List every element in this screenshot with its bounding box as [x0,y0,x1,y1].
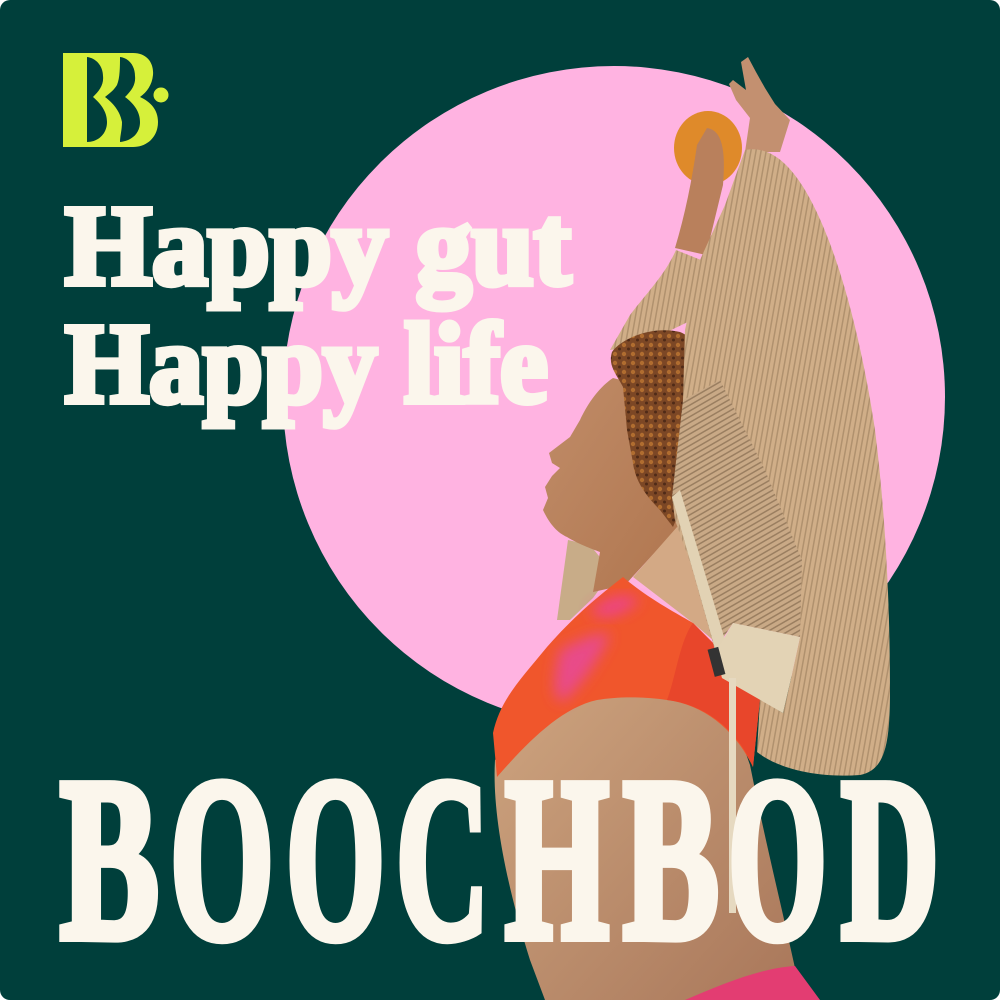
heading: Happy life: Happy life [65,300,548,427]
zipper pull [708,647,725,677]
cardigan fold [672,380,802,650]
bikini pink patches [555,634,610,701]
cardigan main sleeve [672,149,890,776]
collar behind neck [557,540,612,620]
neck and face [543,378,680,592]
torso [495,660,795,1000]
brand wordmark [60,731,939,988]
bare shoulder [633,527,713,640]
left forearm [675,128,724,255]
brand wordmark: B [623,731,719,988]
raised hand and right forearm [729,57,790,152]
pink circle [283,66,945,728]
brand wordmark: C [396,731,489,988]
brand wordmark: O [170,731,274,988]
brand wordmark: B [60,731,159,988]
zipper edge [672,490,725,652]
bikini bottom [685,966,820,1000]
bikini top [493,577,760,777]
brand wordmark: H [505,731,609,988]
figure: woman with orange [493,57,890,1000]
bikini side panel [667,623,760,767]
drawstring [729,678,736,913]
hair [611,330,695,527]
brand wordmark: O [286,731,385,988]
orange [674,111,742,185]
logo icon [63,53,168,147]
brand wordmark: O [728,731,827,988]
left sleeve [610,250,706,350]
heading: Happy gut: Happy gut [65,182,571,309]
ribbed cuff [716,623,800,713]
